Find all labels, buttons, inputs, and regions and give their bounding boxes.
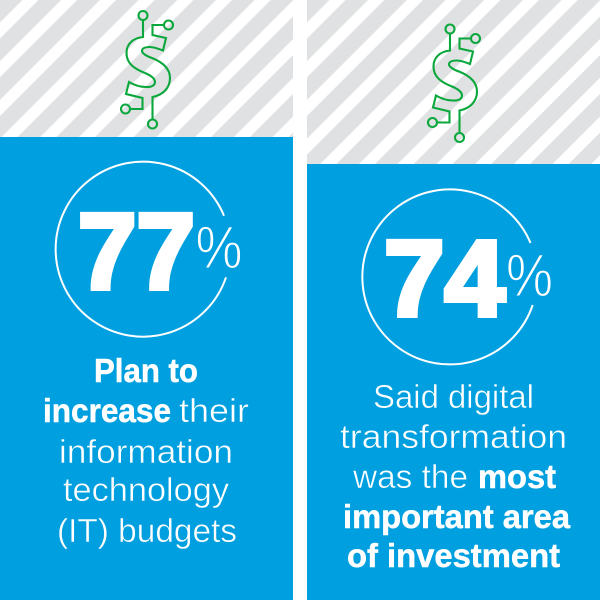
striped header background, left: [0, 0, 293, 137]
text block: investment description: was the: [352, 459, 468, 496]
panel: left budget statistic: [0, 0, 293, 600]
statistic: 77: 77: [78, 190, 195, 312]
blue panel background, left: [0, 137, 293, 600]
percent sign, right: %: [506, 242, 553, 309]
icon: circuit dollar sign, left: [121, 11, 173, 128]
text block: investment description: Said digital: [373, 379, 534, 416]
circle outline around 77 percent: [56, 162, 226, 337]
text block: budget description: increase: [43, 393, 171, 430]
text block: investment description: most: [478, 459, 556, 496]
text block: budget description: their: [179, 393, 249, 430]
icon: circuit dollar sign, right: [428, 24, 480, 142]
striped header background, right: [307, 0, 600, 164]
text block: investment description: important area: [343, 499, 570, 536]
text block: investment description: of investment: [347, 538, 560, 575]
text block: investment description: transformation: [340, 419, 567, 456]
panel: right investment statistic: [307, 0, 600, 600]
circle outline around 74 percent: [362, 189, 533, 364]
blue panel background, right: [307, 164, 600, 600]
text block: budget description: (IT) budgets: [57, 513, 237, 550]
statistic: 74: 74: [384, 218, 505, 338]
text block: budget description: [43, 353, 249, 550]
text block: budget description: Plan to: [94, 353, 198, 390]
text block: investment description: [340, 379, 570, 575]
text block: budget description: technology: [63, 472, 229, 509]
text block: budget description: information: [59, 434, 233, 471]
percent sign, left: %: [196, 214, 242, 281]
